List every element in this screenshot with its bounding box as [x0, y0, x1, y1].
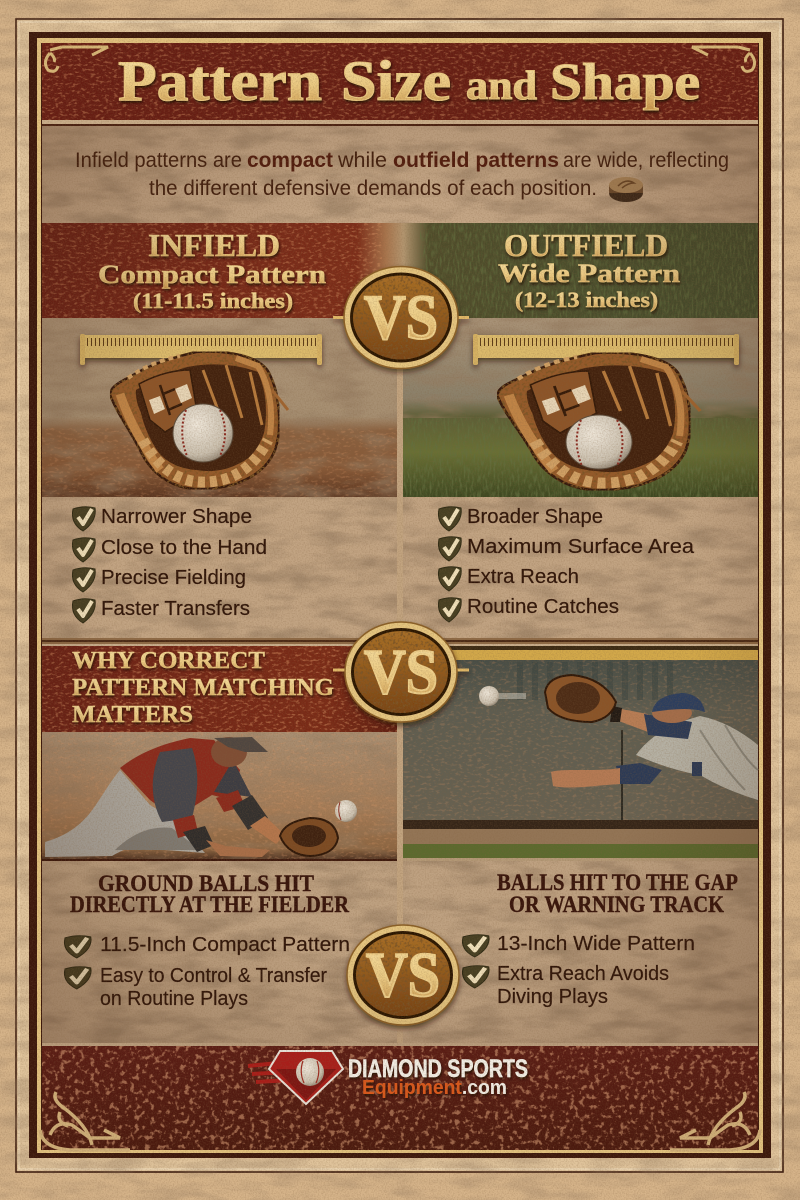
list: infield recommendations: 11.5-Inch Compact Pattern — [100, 934, 350, 956]
heading: ground balls hit directly at the fielder: GROUND BALLS HIT — [98, 871, 314, 896]
heading: Pattern Size and Shape: Size — [341, 50, 451, 113]
illustration: infielder fielding a ground ball — [45, 737, 357, 857]
heading: outfield — [498, 227, 681, 312]
panel: why correct pattern matching matters — [42, 646, 397, 732]
text: intro line one: while — [337, 148, 387, 172]
icon: outfield glove with ball — [497, 353, 700, 490]
list: outfield recommendations: Diving Plays — [497, 986, 608, 1008]
panel: outfield glove image — [403, 318, 758, 497]
heading: Pattern Size and Shape: Pattern — [118, 50, 322, 113]
heading: ground balls hit directly at the fielder: DIRECTLY AT THE FIELDER — [70, 892, 349, 917]
logo: Diamond Sports Equipment — [248, 1051, 528, 1104]
illustration: outfielder diving for a ball — [479, 675, 758, 800]
heading: balls hit to the gap or warning track: OR WARNING TRACK — [509, 892, 724, 917]
heading: outfield: (12-13 inches) — [515, 287, 658, 312]
panel: infield feature list — [42, 497, 397, 638]
heading: ground balls hit directly at the fielder — [70, 871, 349, 917]
list: outfield features: Maximum Surface Area — [467, 536, 695, 558]
VS badge: top: VS — [364, 282, 438, 352]
divider band — [42, 638, 758, 646]
list: infield features — [72, 506, 267, 623]
text: intro line one: are wide, reflecting — [563, 148, 729, 172]
text: intro line two: the different defensive demands of each position. — [149, 176, 597, 200]
heading: Pattern Size and Shape: Shape — [550, 54, 700, 111]
panel: gap balls details — [403, 861, 758, 1043]
panel: ground balls details — [42, 861, 397, 1043]
heading: Pattern Size and Shape — [118, 50, 700, 113]
icon: outfield ruler — [473, 334, 739, 365]
heading: why correct pattern matching matters: PATTERN MATCHING — [72, 675, 334, 701]
list: outfield features: Extra Reach — [467, 566, 579, 588]
list: outfield recommendations — [463, 933, 695, 1008]
panel: diving catch photo — [403, 646, 758, 861]
list: infield recommendations: Easy to Control & Transfer — [100, 965, 327, 987]
heading: infield: Compact Pattern — [98, 260, 327, 289]
icon: top corner flourishes — [45, 47, 755, 71]
icon: bottom corner ornaments — [40, 1092, 760, 1150]
logo: Diamond Sports Equipment: DIAMOND SPORTS — [348, 1055, 528, 1083]
heading: outfield: Wide Pattern — [498, 259, 681, 288]
heading: balls hit to the gap or warning track — [497, 870, 738, 917]
panel: ground ball photo — [42, 732, 397, 859]
heading: Pattern Size and Shape: and — [466, 62, 537, 108]
panel: outfield feature list — [403, 497, 758, 638]
panel: title banner — [42, 43, 758, 126]
panel: infield glove image — [42, 318, 397, 497]
heading: balls hit to the gap or warning track: BALLS HIT TO THE GAP — [497, 870, 738, 895]
list: infield recommendations: on Routine Plays — [100, 988, 248, 1010]
list: outfield recommendations: 13-Inch Wide Pattern — [497, 933, 695, 955]
panel: comparison header — [42, 223, 758, 318]
heading: infield: (11-11.5 inches) — [133, 288, 293, 313]
icon: infield glove with ball — [110, 352, 288, 489]
heading: infield: INFIELD — [148, 227, 280, 263]
heading: why correct pattern matching matters: MATTERS — [72, 702, 193, 728]
text: intro line one: Infield patterns are — [75, 148, 242, 172]
icon: glove puck — [609, 177, 643, 202]
VS badge: bottom: VS — [366, 939, 440, 1010]
list: infield features: Close to the Hand — [101, 537, 267, 559]
VS badge: bottom — [347, 925, 459, 1025]
heading: why correct pattern matching matters — [72, 648, 334, 728]
text: intro line one: compact — [247, 148, 333, 172]
heading: infield — [98, 227, 327, 313]
panel: intro text — [42, 126, 758, 223]
list: infield features: Faster Transfers — [101, 598, 250, 620]
list: infield features: Narrower Shape — [101, 506, 252, 528]
list: outfield features — [438, 506, 695, 622]
heading: outfield: OUTFIELD — [504, 227, 668, 263]
heading: why correct pattern matching matters: WHY CORRECT — [72, 648, 265, 674]
VS badge: top — [333, 266, 469, 368]
list: outfield features: Broader Shape — [467, 506, 603, 528]
list: outfield recommendations: Extra Reach Avoids — [497, 963, 669, 985]
VS badge: middle: VS — [364, 636, 438, 707]
logo: Diamond Sports Equipment: Equipment.com — [362, 1077, 507, 1099]
list: outfield features: Routine Catches — [467, 596, 619, 618]
center column divider — [397, 318, 403, 1043]
text: intro line one: outfield patterns — [393, 148, 559, 172]
list: infield recommendations — [65, 934, 350, 1010]
list: infield features: Precise Fielding — [101, 567, 246, 589]
panel: footer — [42, 1043, 758, 1150]
icon: infield ruler — [80, 334, 322, 365]
VS badge: middle — [333, 622, 469, 722]
